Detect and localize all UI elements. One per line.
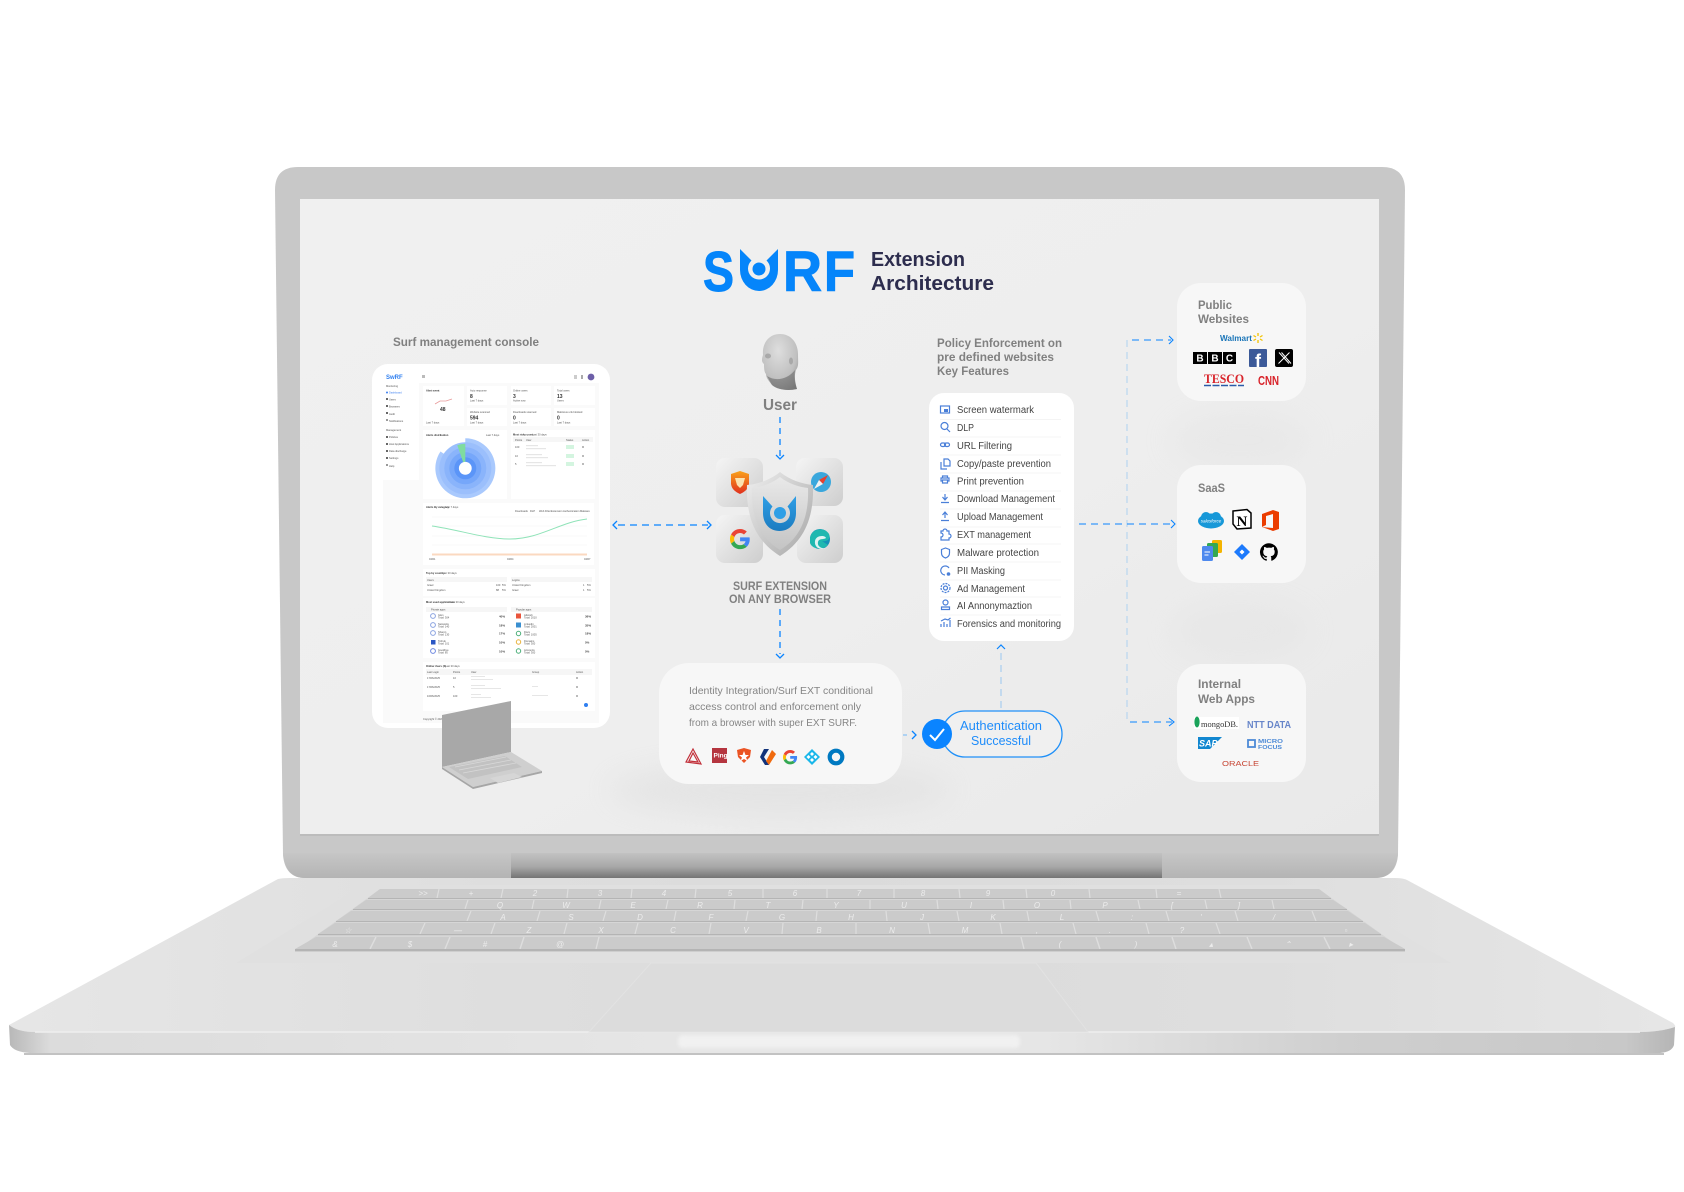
logo: Micro Focus	[1248, 739, 1284, 751]
keyboard row 1: >>	[418, 889, 428, 898]
keyboard row 2: I	[970, 901, 973, 910]
keyboard row 2: U	[901, 901, 907, 910]
feature: print prevention: Print prevention	[957, 476, 1024, 488]
logo: SAP: SAP	[1199, 738, 1219, 748]
keyboard row 2: ]	[1237, 901, 1241, 910]
logo: Walmart: Walmart	[1220, 333, 1252, 343]
console sidebar	[383, 383, 419, 480]
arrow: authentication to features	[997, 645, 1005, 708]
arrow: user to extension	[776, 417, 784, 459]
console sidebar: Management	[386, 428, 401, 432]
feature: AI anonymization: AI Annonymaztion	[957, 601, 1032, 612]
keyboard row 4: —	[453, 926, 463, 935]
feature: EXT management: EXT management	[957, 530, 1031, 541]
feature: copy/paste prevention: Copy/paste prevention	[957, 459, 1051, 470]
feature: DLP	[941, 422, 974, 434]
console most used applications: Total: 60	[438, 650, 448, 654]
keyboard row 3	[336, 911, 1363, 922]
console top by country: 1	[583, 583, 585, 587]
feature: malware protection: Malware protection	[957, 548, 1039, 559]
console top by country: Users	[427, 578, 434, 582]
keyboard row 4: B	[816, 926, 822, 935]
console most used applications: Adwork	[524, 613, 533, 617]
console risky users table: Last 30 days	[532, 432, 547, 436]
console most used applications: Total: 140	[438, 624, 450, 628]
keyboard row 4	[318, 923, 1381, 935]
keyboard row 3: S	[568, 913, 574, 922]
console risky users table: Points	[515, 438, 523, 442]
badge: authentication successful: Authentication	[960, 719, 1042, 733]
console most used applications	[423, 598, 595, 658]
console stat cards: Last 7 days	[470, 398, 484, 402]
console most used applications: Domains	[524, 639, 535, 643]
console risky users table: 100	[515, 445, 520, 449]
console top by country: 5%	[587, 588, 591, 592]
console most used applications: Glen	[438, 613, 444, 617]
panel: key features list	[929, 393, 1074, 641]
title: SURF Extension Architecture	[703, 240, 994, 304]
console sidebar: Audit	[389, 412, 395, 416]
logo: SURF	[703, 240, 855, 304]
screen	[300, 199, 1379, 836]
icon: Brave tile	[716, 458, 763, 507]
console sidebar: Policies	[389, 435, 399, 439]
keyboard row 1: 4	[662, 889, 667, 898]
console most used applications: 5%	[585, 640, 590, 644]
feature: download management: Download Management	[957, 494, 1055, 505]
console stat cards: Last 7 days	[470, 420, 484, 424]
arrow: identity to authentication	[903, 731, 916, 739]
badge: authentication successful	[922, 711, 1062, 757]
console line chart: DLP	[530, 509, 535, 513]
console stat cards: Users	[557, 398, 564, 402]
console sidebar: Users	[389, 398, 396, 402]
identity description: Identity Integration/Surf EXT conditional	[689, 685, 873, 697]
icon: Safari tile	[796, 458, 843, 506]
console blocked events table: Online Users (3)	[426, 664, 446, 668]
label: SURF extension on any browser: SURF EXTENSION	[733, 579, 827, 593]
keyboard row 2: W	[562, 901, 571, 910]
panel: internal web apps: Web Apps	[1198, 692, 1255, 706]
panel: identity integration	[659, 663, 902, 784]
keyboard row 3: '	[1200, 913, 1202, 922]
panel: public websites	[1177, 283, 1306, 401]
console stat cards: Total users	[557, 388, 570, 392]
console stat cards: Malicious urls blocked	[557, 410, 583, 414]
console line chart: Malware	[580, 509, 590, 513]
console stat cards: 594	[470, 416, 479, 422]
keyboard row 5: @	[556, 940, 564, 949]
logo: BBC: B	[1196, 354, 1204, 364]
console line chart: Authentication	[563, 509, 580, 513]
console sidebar: Dashboard	[389, 390, 402, 394]
laptop base	[9, 878, 1675, 1055]
console most used applications: 40%	[499, 614, 505, 618]
console sidebar: Settings	[389, 456, 399, 460]
logo: X	[1275, 349, 1293, 367]
keyboard row 5: #	[483, 940, 488, 949]
console stat cards: 3	[513, 394, 516, 400]
console risky users table: 10	[515, 454, 518, 458]
keyboard row 2: T	[766, 901, 772, 910]
panel: management console	[372, 364, 610, 728]
console stat cards: Downloads scanned	[513, 410, 537, 414]
keyboard row 3: /	[1272, 913, 1276, 922]
console most used applications: 17%	[499, 632, 505, 636]
icon: user head	[762, 334, 798, 390]
console sidebar: Help	[389, 464, 395, 468]
keyboard row 1: 6	[793, 889, 798, 898]
keyboard row 1: 7	[857, 889, 862, 898]
logo: Office	[1262, 510, 1279, 531]
console most used applications: Linkedin	[524, 622, 534, 626]
badge: authentication successful: Successful	[971, 734, 1031, 748]
laptop lid	[275, 167, 1405, 878]
console most used applications: Accounts	[524, 648, 535, 652]
console top by country: 5%	[587, 583, 591, 587]
console blocked events table: Group	[532, 670, 540, 674]
logo: BBC: B	[1211, 354, 1219, 364]
console most used applications: Popular apps	[516, 608, 532, 612]
icon: shield with SURF mark	[747, 472, 813, 556]
keyboard row 4: V	[743, 926, 749, 935]
console sunburst chart	[423, 430, 507, 499]
console top by country: Logins	[512, 578, 520, 582]
console top by country: Last 30 days	[442, 571, 457, 575]
keyboard row 5: ⌃	[1285, 940, 1292, 949]
console top by country: 88	[496, 588, 499, 592]
icon: Edge tile	[797, 515, 843, 563]
console most used applications: Docs	[524, 630, 531, 634]
console blocked events table: Last Login	[427, 670, 440, 674]
keyboard row 1: 2	[532, 889, 538, 898]
panel: management console: Copyright © 2025	[423, 717, 444, 721]
arrow: extension to identity	[776, 609, 784, 658]
console blocked events table	[423, 662, 595, 711]
keyboard row 3: L	[1060, 913, 1064, 922]
identity provider icons	[686, 748, 842, 765]
console blocked events table: Points	[453, 670, 461, 674]
keyboard row 3: :	[1131, 913, 1133, 922]
console stat cards	[423, 386, 595, 426]
console risky users table: 5	[515, 462, 517, 466]
keyboard row 1: 8	[921, 889, 926, 898]
console top by country: United Kingdom	[427, 588, 445, 592]
keyboard row 3: G	[779, 913, 785, 922]
console line chart: 04/01	[429, 557, 436, 561]
logo: SURF: S	[703, 240, 734, 304]
console stat cards: Last 7 days	[426, 420, 440, 424]
identity description: from a browser with super EXT SURF.	[689, 717, 857, 729]
console top by country: 5%	[502, 583, 506, 587]
console top by country: 1	[583, 588, 585, 592]
logo: CNN: CNN	[1258, 373, 1279, 388]
console blocked events table: Last 30 days	[445, 664, 460, 668]
icon group: browser extension	[716, 458, 843, 563]
console stat cards: Website scanned	[470, 410, 490, 414]
identity provider icons: Ping	[714, 752, 728, 760]
logo: Salesforce: salesforce	[1201, 518, 1222, 524]
panel: SaaS: SaaS	[1198, 481, 1225, 495]
keyboard row 1	[368, 889, 1331, 899]
keyboard row 3: K	[990, 913, 996, 922]
keyboard row 1: 3	[598, 889, 603, 898]
console sidebar: Browsers	[389, 404, 401, 408]
console top by country: Israel	[427, 583, 434, 587]
identity description: access control and enforcement only	[689, 701, 862, 713]
console most used applications: Total: 130	[438, 632, 450, 636]
console blocked events table: 5	[453, 685, 455, 689]
console header: SwRF	[386, 375, 403, 381]
console line chart: Downloads	[515, 509, 529, 513]
console blocked events table: 17/06/2025	[427, 676, 441, 680]
connector: features to apps	[1079, 336, 1175, 726]
console line chart: 04/07	[584, 557, 591, 561]
keyboard row 2: [	[1170, 901, 1174, 910]
heading: policy enforcement key features: pre defined websites	[937, 350, 1054, 364]
console line chart: Alerts By category	[426, 505, 449, 509]
logo: SURF: F	[824, 240, 855, 304]
console risky users table: User	[526, 438, 532, 442]
console risky users table: Most risky users	[513, 432, 534, 436]
console most used applications: Total: 300	[524, 642, 536, 646]
console top by country: Israel	[512, 588, 519, 592]
feature: ad management: Ad Management	[957, 584, 1025, 595]
icon: small laptop	[442, 701, 542, 789]
console stat cards: Last 7 days	[513, 420, 527, 424]
keyboard row 2: R	[697, 901, 703, 910]
console most used applications: Sharon	[438, 630, 447, 634]
logo: SURF: R	[783, 240, 822, 304]
keyboard row 4: ☆	[344, 926, 352, 935]
console blocked events table: 10	[453, 676, 456, 680]
keyboard row 4: C	[670, 926, 676, 935]
console most used applications: 5%	[585, 650, 590, 654]
feature: forensics and monitoring: Forensics and monitoring	[957, 619, 1061, 630]
label: SURF extension on any browser: ON ANY BROWSER	[729, 592, 831, 606]
feature: upload management: Upload Management	[957, 512, 1043, 523]
console stat cards: 8	[470, 394, 473, 400]
console stat cards: Online users	[513, 388, 528, 392]
console line chart: Web Filter	[539, 509, 551, 513]
console sidebar: Notifications	[389, 419, 404, 423]
console most used applications: 36%	[585, 614, 591, 618]
console top by country	[423, 569, 595, 596]
icon: Google tile	[716, 515, 763, 563]
keyboard row 4: N	[889, 926, 895, 935]
console risky users table: Status	[566, 438, 574, 442]
console most used applications: Total: 304	[438, 616, 450, 620]
keyboard row 2: E	[630, 901, 636, 910]
console header	[386, 374, 594, 381]
keyboard row 3: F	[709, 913, 715, 922]
panel: internal web apps: Internal	[1198, 677, 1241, 691]
console most used applications: Total: 101	[438, 642, 450, 646]
keyboard row 5: (	[1059, 940, 1063, 949]
feature: PII masking: PII Masking	[957, 566, 1005, 577]
console most used applications: Total: 1005	[524, 632, 537, 636]
keyboard row 5: $	[407, 940, 413, 949]
heading: Surf management console: Surf management console	[393, 335, 539, 349]
console most used applications: Goodbye	[438, 648, 449, 652]
keyboard row 1: +	[469, 889, 474, 898]
heading text: Extension	[871, 249, 965, 271]
console most used applications: 18%	[499, 624, 505, 628]
logo: Micro Focus: FOCUS	[1258, 745, 1282, 751]
logo: Oracle: ORACLE	[1222, 759, 1259, 768]
logo: GitHub	[1260, 543, 1278, 561]
keyboard row 4: .	[1109, 926, 1111, 935]
label: User: User	[763, 397, 797, 414]
panel: public websites: Websites	[1198, 312, 1249, 326]
keyboard row 2: Q	[497, 901, 503, 910]
console risky users table: Action	[582, 438, 590, 442]
logo: Google Workspace docs	[1202, 540, 1222, 561]
keyboard row 3: H	[848, 913, 854, 922]
console stat cards: 0	[513, 416, 516, 422]
console top by country: Top by country	[426, 571, 445, 575]
logo: NTT Data: NTT DATA	[1247, 720, 1291, 731]
console stat cards: 0	[557, 416, 560, 422]
keyboard row 3: A	[499, 913, 506, 922]
keyboard row 1: 9	[986, 889, 991, 898]
keyboard row 1: =	[1177, 889, 1182, 898]
keyboard row 1: 5	[728, 889, 733, 898]
console line chart	[423, 503, 594, 565]
logo: BBC: C	[1226, 354, 1233, 364]
console stat cards: Active now	[513, 398, 526, 402]
console most used applications: 35%	[585, 624, 591, 628]
console most used applications: 10%	[499, 650, 505, 654]
console most used applications: Total: 2010	[524, 616, 537, 620]
icon: check circle	[922, 719, 952, 749]
keyboard row 5: &	[332, 940, 338, 949]
keyboard row 4: ,	[1036, 926, 1038, 935]
keyboard row 2: P	[1102, 901, 1108, 910]
console most used applications: Most used applications	[426, 600, 455, 604]
keyboard row 1: 0	[1051, 889, 1056, 898]
console sidebar: Host Applications	[389, 442, 410, 446]
logo: Jira	[1234, 544, 1250, 560]
console most used applications: Private apps	[431, 608, 446, 612]
console top by country: 5%	[502, 588, 506, 592]
panel: public websites: Public	[1198, 298, 1232, 312]
heading: policy enforcement key features: Policy Enforcement on	[937, 336, 1062, 350]
logo: BBC	[1193, 352, 1236, 364]
console sunburst chart: Alerts distribution	[426, 433, 449, 437]
feature: DLP: DLP	[957, 423, 974, 434]
logo: Facebook: f	[1255, 351, 1262, 371]
arrow: console to extension	[613, 521, 711, 529]
keyboard row 5: ▴	[1209, 940, 1214, 949]
console most used applications: Total: 300	[524, 650, 536, 654]
console sunburst chart: Last 7 days	[486, 433, 500, 437]
console top by country: 100	[496, 583, 501, 587]
console top by country: United Kingdom	[512, 583, 530, 587]
console blocked events table: 16/06/2025	[427, 694, 441, 698]
keyboard row 4: M	[962, 926, 969, 935]
console stat cards: Last 7 days	[557, 420, 571, 424]
panel: internal web apps	[1177, 664, 1306, 782]
heading: policy enforcement key features: Key Features	[937, 364, 1009, 378]
console stat cards: Auto response	[470, 388, 487, 392]
keyboard row 2	[353, 900, 1347, 910]
console risky users table	[511, 430, 595, 499]
logo: MongoDB: mongoDB.	[1201, 719, 1238, 729]
logo: Micro Focus: MICRO	[1258, 739, 1284, 745]
console sidebar: Monitoring	[386, 384, 399, 388]
console line chart: Last 7 days	[445, 505, 459, 509]
keyboard row 4: ?	[1180, 926, 1185, 935]
console most used applications: 18%	[585, 632, 591, 636]
feature: screen watermark: Screen watermark	[957, 405, 1035, 416]
keyboard row 4: ▫	[1345, 926, 1348, 935]
panel: SaaS	[1177, 465, 1306, 583]
console stat cards: 13	[557, 394, 563, 400]
console stat cards: 48	[440, 407, 446, 413]
logo: Notion: N	[1236, 514, 1248, 530]
console stat cards: Alert event	[426, 388, 440, 392]
keyboard row 2: O	[1034, 901, 1040, 910]
keyboard	[295, 889, 1405, 951]
keyboard row 5: ▸	[1349, 940, 1354, 949]
keyboard row 4: Z	[526, 926, 533, 935]
console blocked events table: User	[471, 670, 477, 674]
console sidebar: Data discharge	[389, 449, 407, 453]
keyboard row 5: )	[1134, 940, 1138, 949]
keyboard row 4: X	[597, 926, 604, 935]
logo: Tesco: TESCO	[1204, 371, 1244, 386]
console blocked events table: 17/06/2025	[427, 685, 441, 689]
heading text: Architecture	[871, 273, 994, 295]
console blocked events table: Action	[576, 670, 584, 674]
console most used applications: Last 30 days	[450, 600, 465, 604]
console most used applications: Tobruk	[438, 639, 446, 643]
keyboard row 3: J	[919, 913, 925, 922]
console most used applications: Networks	[438, 622, 450, 626]
console blocked events table: 100	[453, 694, 458, 698]
keyboard row 5	[295, 937, 1405, 951]
feature: URL filtering: URL Filtering	[957, 441, 1012, 452]
console line chart: Extension	[551, 509, 563, 513]
console line chart: 04/04	[507, 557, 514, 561]
keyboard row 2: Y	[833, 901, 839, 910]
console most used applications: Total: 2001	[524, 624, 537, 628]
console most used applications: 10%	[499, 640, 505, 644]
keyboard row 3: D	[637, 913, 643, 922]
